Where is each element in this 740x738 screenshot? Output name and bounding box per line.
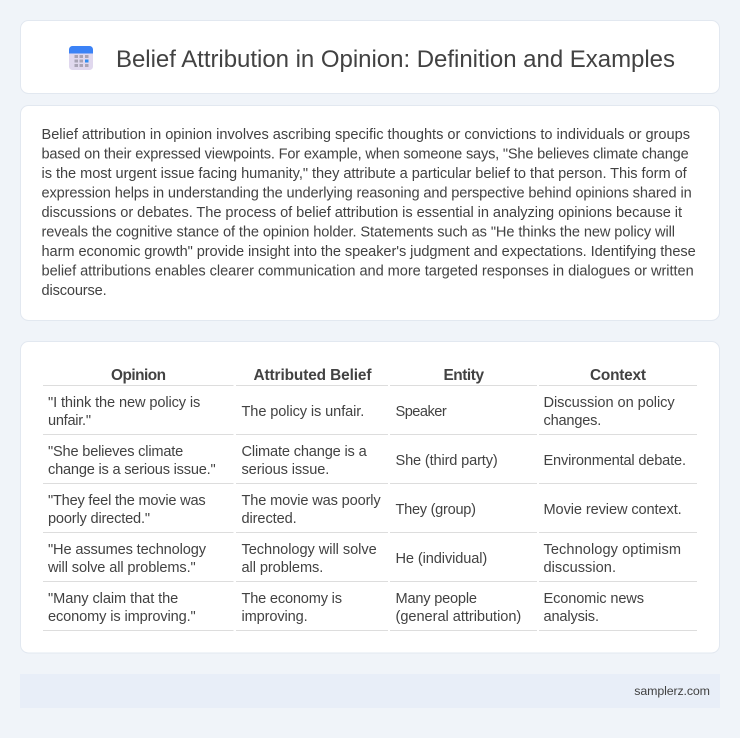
text block: paragraph xyxy=(42,127,696,299)
table row 1: changes. xyxy=(544,413,601,429)
table header row xyxy=(111,367,646,384)
footer bar xyxy=(20,674,720,708)
table grid lines xyxy=(43,385,697,631)
table row 4: He (individual) xyxy=(396,551,487,567)
text block: paragraph: discussions or debates. The process of belief attribution is essential in analyzing opinions because it xyxy=(42,205,682,221)
table row 5: The economy is xyxy=(242,591,342,607)
title: Belief Attribution in Opinion: Definition and Examples xyxy=(116,46,675,73)
table header row: Context xyxy=(590,367,646,384)
table row 1 xyxy=(48,395,675,429)
table row 4: will solve all problems." xyxy=(47,560,196,576)
table row 3: poorly directed." xyxy=(48,511,150,527)
table row 4: discussion. xyxy=(544,560,616,576)
table row 5: (general attribution) xyxy=(396,609,521,625)
table row 5 xyxy=(48,591,644,625)
table row 2: Environmental debate. xyxy=(544,453,686,469)
table header row: Attributed Belief xyxy=(254,367,372,384)
table row 2: She (third party) xyxy=(396,453,498,469)
table row 5: "Many claim that the xyxy=(48,591,178,607)
table row 5: Economic news xyxy=(544,591,644,607)
panel: table xyxy=(20,342,720,653)
table row 3: They (group) xyxy=(396,502,476,518)
text block: paragraph: reveals the cognitive stance of the opinion holder. Statements such as "He thinks the new policy will xyxy=(42,224,675,240)
header panel xyxy=(20,20,720,94)
table row 4: all problems. xyxy=(242,560,323,576)
text block: paragraph: based on their expressed viewpoints. For example, when someone says, "She believes climate change xyxy=(42,146,689,162)
table row 1: Speaker xyxy=(396,404,447,420)
text block: paragraph: belief attributions enables clearer communication and more targeted responses in dialogues or written xyxy=(42,264,694,280)
table row 5: analysis. xyxy=(544,609,599,625)
table row 5: improving. xyxy=(242,609,308,625)
table row 1: unfair." xyxy=(48,413,91,429)
table row 3 xyxy=(48,493,682,527)
table row 3: directed. xyxy=(242,511,297,527)
table header row: Opinion xyxy=(111,367,166,384)
table row 3: Movie review context. xyxy=(544,502,682,518)
table row 1: "I think the new policy is xyxy=(48,395,200,411)
text block: paragraph: is the most urgent issue facing humanity," they attribute a particular belief to that person. This form of xyxy=(42,166,688,182)
text block: paragraph: Belief attribution in opinion involves ascribing specific thoughts or convictions to individuals or groups xyxy=(42,127,690,143)
table row 3: The movie was poorly xyxy=(242,493,381,509)
table row 4: "He assumes technology xyxy=(48,542,207,558)
text block: paragraph: expression helps in understanding the underlying reasoning and perspective behind opinions shared in xyxy=(42,186,692,202)
table row 1: The policy is unfair. xyxy=(242,404,364,420)
table row 5: Many people xyxy=(396,591,477,607)
table row 2 xyxy=(48,444,686,478)
table row 4: Technology will solve xyxy=(242,542,377,558)
table row 4: Technology optimism xyxy=(544,542,681,558)
table row 2: change is a serious issue." xyxy=(48,462,216,478)
table row 3: "They feel the movie was xyxy=(48,493,206,509)
panel: description xyxy=(20,106,720,320)
table row 5: economy is improving." xyxy=(48,609,196,625)
table row 4 xyxy=(47,542,681,576)
table row 2: "She believes climate xyxy=(48,444,183,460)
table row 2: Climate change is a xyxy=(242,444,368,460)
table header row: Entity xyxy=(444,367,484,384)
table row 2: serious issue. xyxy=(242,462,329,478)
table row 1: Discussion on policy xyxy=(544,395,675,411)
text block: paragraph: discourse. xyxy=(42,283,107,299)
icon: calendar grid xyxy=(69,46,93,70)
text block: paragraph: harm economic growth" provide insight into the speaker's judgment and expectations. Identifying these xyxy=(42,244,696,260)
footer source text: samplerz.com xyxy=(634,684,710,698)
